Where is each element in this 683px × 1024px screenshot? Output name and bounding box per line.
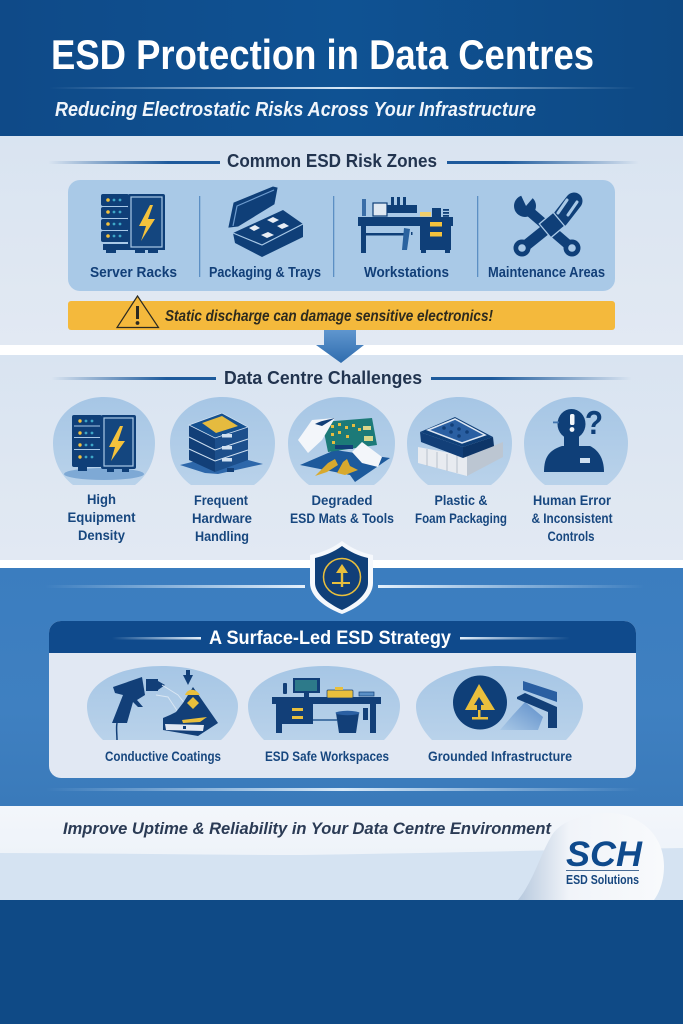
label: ESD Safe Workspaces xyxy=(265,749,389,764)
white stripe one xyxy=(0,345,683,355)
label: & Inconsistent xyxy=(532,510,613,526)
warning text: Static discharge can damage sensitive electronics! xyxy=(165,308,494,325)
dome xyxy=(524,397,628,485)
panel heading: A Surface-Led ESD Strategy xyxy=(209,628,451,649)
dome xyxy=(416,666,583,740)
strategy: conductive coatings xyxy=(87,666,238,764)
label: Conductive Coatings xyxy=(105,749,221,764)
challenge: plastic and foam packaging xyxy=(407,397,512,526)
label: High xyxy=(87,491,116,507)
icon: question mark: ? xyxy=(585,404,603,441)
label: Human Error xyxy=(533,492,611,508)
label: Foam Packaging xyxy=(415,510,507,526)
icon: spray gun and pyramid xyxy=(112,670,218,740)
icon: server rack xyxy=(64,415,144,480)
icon: shield xyxy=(310,541,373,614)
dome xyxy=(407,397,512,485)
label: server racks: Server Racks xyxy=(90,264,177,281)
icon: circuit board and mat xyxy=(298,418,390,482)
label xyxy=(192,492,252,544)
footer band xyxy=(0,806,683,900)
icon: ground badge xyxy=(453,676,507,730)
icon: server rack xyxy=(101,194,165,253)
icon: desk xyxy=(272,678,381,733)
title: ESD Protection in Data Centres xyxy=(51,31,594,78)
label: Hardware xyxy=(192,510,252,526)
panel: surface-led ESD strategy xyxy=(49,621,636,778)
section: data centre challenges xyxy=(0,355,683,560)
challenge: degraded ESD mats and tools xyxy=(288,397,395,526)
dome xyxy=(288,397,395,485)
label: Equipment xyxy=(68,509,136,525)
label xyxy=(68,491,136,543)
label: workstations: Workstations xyxy=(364,264,449,281)
label: Frequent xyxy=(194,492,248,508)
heading: data centre challenges: Data Centre Challenges xyxy=(224,368,422,388)
dome xyxy=(248,666,400,740)
dome xyxy=(53,397,155,485)
header band xyxy=(0,0,683,136)
divider line lower xyxy=(46,788,640,791)
icon: warning triangle xyxy=(117,296,158,328)
label: Density xyxy=(78,527,125,543)
logo: SCH ESD Solutions: SCH xyxy=(566,835,643,874)
heading: data centre challenges xyxy=(51,368,632,388)
icon: worker with question xyxy=(544,409,604,472)
icon: packaging tray xyxy=(229,187,303,257)
panel: risk zones xyxy=(68,180,615,291)
label xyxy=(532,492,613,544)
icon: server stack xyxy=(180,413,263,474)
label: Controls xyxy=(548,528,595,544)
icon: foam tray xyxy=(418,417,503,476)
label xyxy=(415,492,507,526)
arrow: risk zones to challenges xyxy=(316,330,364,363)
label: Plastic & xyxy=(434,492,488,508)
label xyxy=(290,492,394,526)
heading: common ESD risk zones xyxy=(48,151,639,171)
logo: SCH ESD Solutions: ESD Solutions xyxy=(566,872,639,887)
section: common ESD risk zones xyxy=(0,136,683,345)
footer message: Improve Uptime & Reliability in Your Data Centre Environment xyxy=(63,820,552,838)
label: Handling xyxy=(195,528,249,544)
label: packaging and trays: Packaging & Trays xyxy=(209,265,321,281)
dome xyxy=(87,666,238,740)
icon: workstation xyxy=(358,197,453,253)
challenge: high equipment density xyxy=(53,397,155,543)
dome xyxy=(170,397,275,485)
label: ESD Mats & Tools xyxy=(290,510,394,526)
icon: ramp xyxy=(500,702,543,730)
strategy: ESD safe workspaces xyxy=(248,666,400,764)
label: Grounded Infrastructure xyxy=(428,749,572,764)
label: maintenance areas: Maintenance Areas xyxy=(488,265,605,281)
bottom dark band xyxy=(0,900,683,1024)
icon: crossed tools xyxy=(514,191,580,256)
strategy: grounded infrastructure xyxy=(416,666,583,764)
white stripe two xyxy=(0,560,683,568)
heading: common ESD risk zones: Common ESD Risk Zones xyxy=(227,151,437,171)
label: Degraded xyxy=(312,492,372,508)
subtitle: Reducing Electrostatic Risks Across Your Infrastructure xyxy=(55,99,536,121)
section: surface-led strategy background xyxy=(0,568,683,806)
icon: grounded rack bracket xyxy=(517,681,557,728)
challenge: frequent hardware handling xyxy=(170,397,275,544)
challenge: human error xyxy=(524,397,628,544)
logo: SCH ESD Solutions xyxy=(518,813,664,900)
divider lines beside shield xyxy=(44,585,645,588)
warning bar xyxy=(68,296,615,330)
